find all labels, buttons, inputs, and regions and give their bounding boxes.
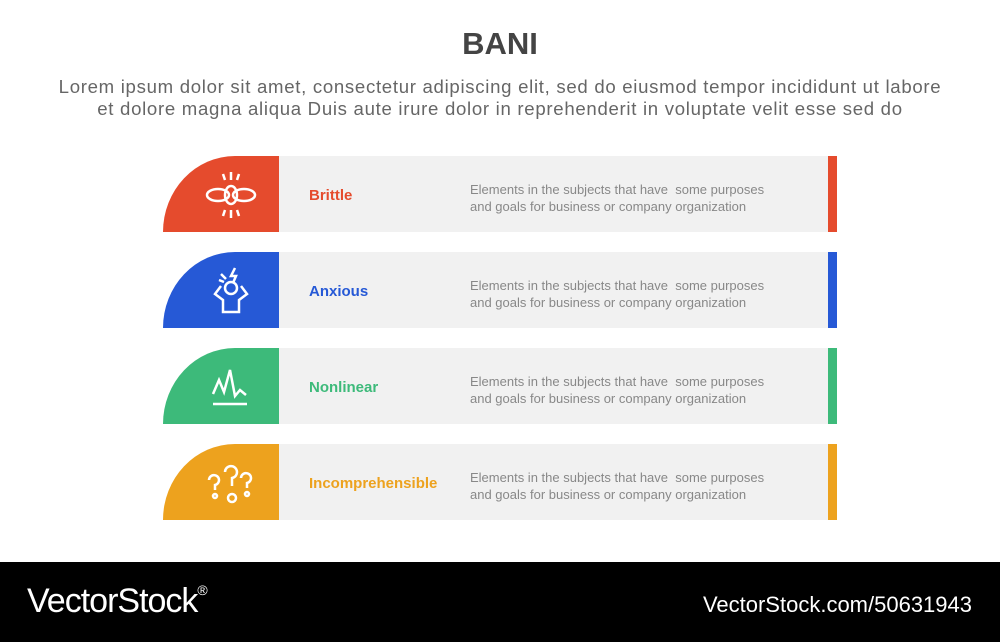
description [470, 182, 764, 214]
label: Nonlinear [309, 379, 378, 396]
subtitle [59, 76, 941, 119]
icon: broken chain [206, 172, 256, 218]
footer: VectorStock.com/50631943 [703, 592, 972, 617]
footer [0, 562, 1000, 642]
panel: incomprehensible [163, 444, 837, 520]
footer: VectorStock® [27, 582, 207, 620]
description: and goals for business or company organization [470, 199, 746, 214]
label: Anxious [309, 283, 368, 300]
subtitle: et dolore magna aliqua Duis aute irure dolor in reprehenderit in voluptate velit esse sed do [97, 98, 903, 119]
description: Elements in the subjects that have some purposes [470, 374, 764, 389]
subtitle: Lorem ipsum dolor sit amet, consectetur adipiscing elit, sed do eiusmod tempor incididunt ut labore [59, 76, 941, 97]
description: Elements in the subjects that have some purposes [470, 278, 764, 293]
icon: anxious person [213, 268, 249, 314]
description [470, 470, 764, 502]
description [470, 374, 764, 406]
description: and goals for business or company organization [470, 391, 746, 406]
label: Brittle [309, 187, 352, 204]
description: and goals for business or company organization [470, 295, 746, 310]
panel: nonlinear [163, 348, 837, 424]
description: and goals for business or company organization [470, 487, 746, 502]
label: Incomprehensible [309, 475, 437, 492]
icon: chart line [212, 370, 247, 406]
panel: anxious [163, 252, 837, 328]
title: BANI [462, 26, 538, 61]
description: Elements in the subjects that have some purposes [470, 470, 764, 485]
icon: question marks [208, 464, 252, 504]
panel: brittle [163, 156, 837, 232]
description [470, 278, 764, 310]
description: Elements in the subjects that have some purposes [470, 182, 764, 197]
